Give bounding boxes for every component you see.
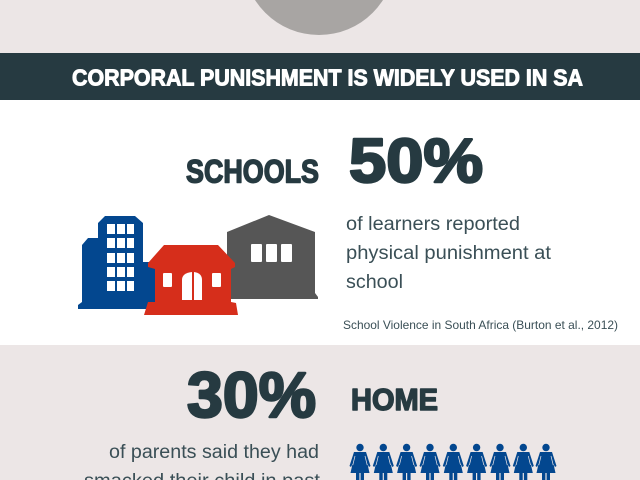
heading: home: HOME [351, 382, 438, 417]
text: learners description: physical punishment at [346, 243, 552, 264]
text: parents description [84, 442, 321, 480]
grey circle at top [243, 0, 395, 35]
icon: red school [144, 245, 238, 315]
citation: School Violence in South Africa (Burton et al., 2012) [343, 318, 618, 332]
text: learners description [346, 214, 552, 293]
text: parents description: of parents said they had [109, 442, 319, 463]
text: learners description: of learners reported [346, 214, 520, 235]
panel: home [84, 359, 556, 480]
text: learners description: school [346, 272, 403, 293]
icon: row of nine women [350, 444, 556, 480]
heading: schools: SCHOOLS [186, 154, 319, 190]
icon: school buildings [78, 215, 318, 315]
icon: grey hall [227, 215, 318, 299]
statistic: 50%: 50% [349, 127, 483, 196]
icon: blue tower [78, 216, 160, 309]
statistic: 30%: 30% [187, 359, 316, 431]
title banner [0, 53, 640, 100]
panel: schools [0, 100, 640, 345]
title banner: CORPORAL PUNISHMENT IS WIDELY USED IN SA [72, 64, 583, 90]
